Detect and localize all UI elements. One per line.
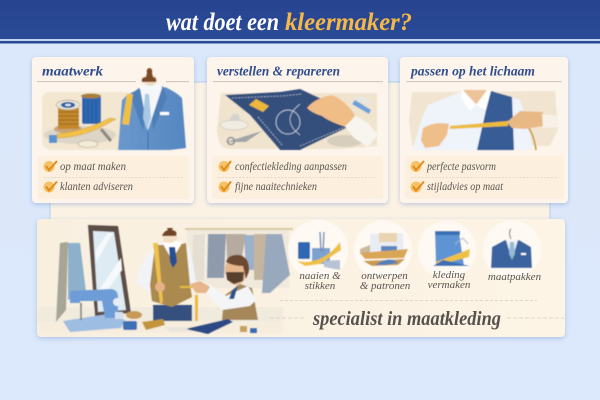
panel: verstellen en repareren xyxy=(207,57,388,203)
list: maatwerk xyxy=(38,156,189,199)
title: wat doet een xyxy=(166,9,279,36)
label: maatpakken xyxy=(488,271,542,283)
icon: ontwerpen en patronen xyxy=(354,221,412,279)
mirror xyxy=(88,225,131,316)
heading: verstellen & repareren: verstellen & repareren xyxy=(217,64,340,80)
label: ontwerpen xyxy=(361,270,408,282)
icon: check xyxy=(44,182,57,192)
title xyxy=(166,9,412,36)
list: passen: perfecte pasvorm xyxy=(426,161,496,173)
mannequin xyxy=(136,228,198,321)
icon: check xyxy=(410,182,424,192)
icon: check xyxy=(44,161,57,172)
list: maatwerk: klanten adviseren xyxy=(60,181,133,193)
header banner xyxy=(0,0,600,44)
label: & patronen xyxy=(360,280,411,292)
label: vermaken xyxy=(428,279,471,291)
illustration: denim repair xyxy=(217,89,378,150)
list: passen: stijladvies op maat xyxy=(427,181,504,193)
heading: maatwerk: maatwerk xyxy=(42,64,103,80)
list: maatwerk: op maat maken xyxy=(60,161,126,173)
list: verstellen: fijne naaitechnieken xyxy=(235,181,317,193)
tailoring notions xyxy=(123,311,257,334)
label: naaien & xyxy=(299,270,341,282)
title: kleermaker? xyxy=(285,9,412,36)
illustration: atelier scene xyxy=(38,225,293,334)
list: passen xyxy=(405,156,564,199)
tailor xyxy=(190,255,258,320)
illustration: spools, tape and suit on mannequin xyxy=(42,68,186,150)
panel: bottom atelier xyxy=(37,219,565,337)
clothes rack xyxy=(185,228,293,293)
tagline: specialist in maatkleding xyxy=(312,309,501,330)
illustration: measuring chest xyxy=(409,90,558,150)
icon: kleding vermaken xyxy=(418,221,476,279)
icon: check xyxy=(410,161,424,172)
list: verstellen xyxy=(212,156,383,199)
label: stikken xyxy=(305,280,336,292)
list: verstellen: confectiekleding aanpassen xyxy=(235,161,347,173)
label: kleding xyxy=(433,269,466,281)
icon: naaien en stikken xyxy=(288,220,348,280)
icon: maatpakken xyxy=(483,221,541,279)
panel: passen op het lichaam xyxy=(400,57,568,203)
icon: check xyxy=(218,182,231,192)
back panel xyxy=(50,82,550,220)
heading: passen op het lichaam: passen op het lichaam xyxy=(410,64,535,80)
hanging fabric xyxy=(56,242,86,322)
icon: check xyxy=(218,161,231,172)
sewing machine xyxy=(63,289,125,332)
panel: maatwerk xyxy=(32,57,194,203)
